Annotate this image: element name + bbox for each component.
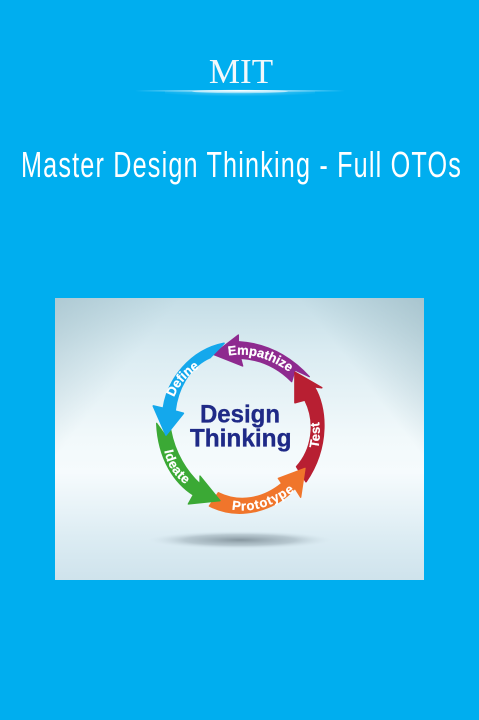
arrow: Empathize: [214, 334, 310, 382]
arrow: Test: Test: [309, 422, 320, 448]
arrow: Prototype: [208, 468, 306, 514]
arrow: Empathize: Empathize: [228, 346, 292, 371]
arrow: Define: Define: [166, 363, 198, 397]
panel: design thinking image: [55, 298, 424, 580]
center heading: Design Thinking: [190, 401, 291, 453]
arrow: Ideate: Ideate: [164, 450, 188, 484]
cycle diagram: [152, 334, 325, 514]
arrow: Define: [152, 342, 225, 436]
divider glow under brand: [135, 90, 345, 100]
arrow: Ideate: [156, 422, 221, 505]
arrow: Test: [294, 372, 325, 482]
title: Master Design Thinking - Full OTOs: [21, 145, 462, 185]
ground shadow: [148, 531, 332, 549]
center heading: Design Thinking: Design: [200, 401, 280, 428]
arrow: Prototype: Prototype: [232, 486, 294, 511]
brand: MIT: MIT: [209, 52, 273, 91]
center heading: Design Thinking: Thinking: [190, 426, 291, 453]
